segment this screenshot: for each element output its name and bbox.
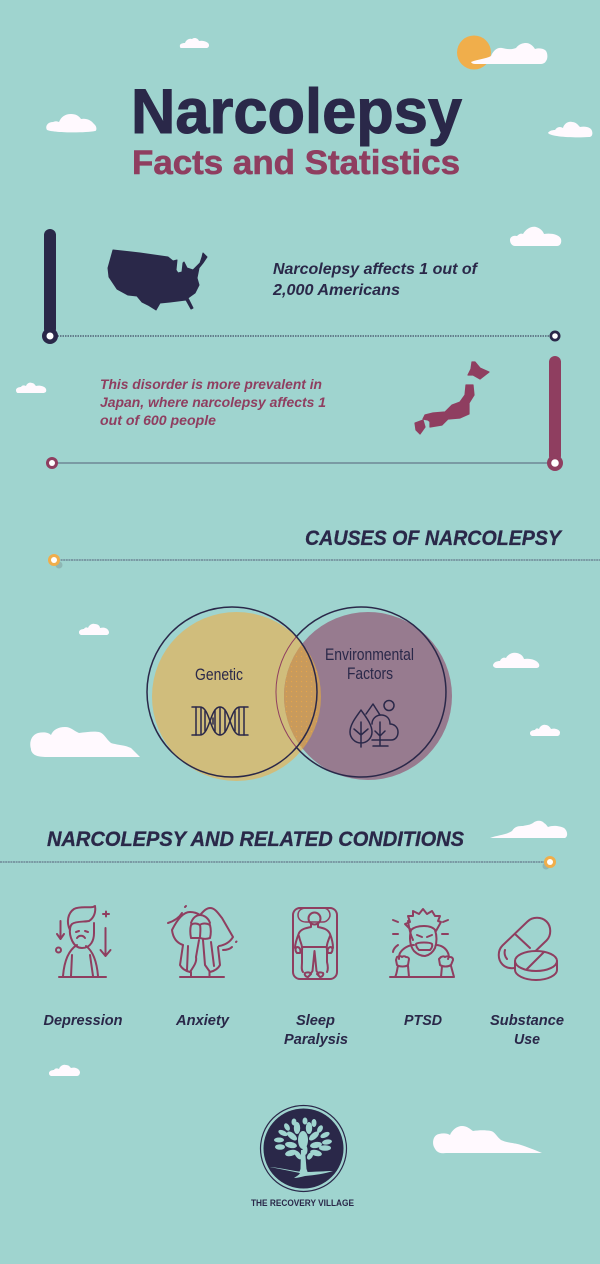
cloud: bottom right	[433, 1126, 542, 1153]
text: USA fact: Narcolepsy affects 1 out of	[273, 261, 479, 278]
logo: wordmark: THE RECOVERY VILLAGE	[251, 1198, 354, 1208]
logo: tree	[270, 1118, 333, 1178]
cloud: top centre	[180, 38, 209, 48]
subtitle: Facts and Statistics	[132, 144, 460, 182]
timeline: USA	[42, 229, 560, 344]
venn: overlap	[284, 644, 321, 749]
label: genetic: Genetic	[195, 665, 243, 684]
label: depression: Depression	[44, 1012, 122, 1029]
cloud: left of title	[46, 114, 96, 132]
icon: PTSD	[390, 909, 454, 977]
cloud: bottom left	[49, 1065, 80, 1076]
condition: PTSD	[390, 909, 454, 1029]
icon: anxiety	[168, 906, 236, 977]
heading: related conditions: NARCOLEPSY AND RELATED CONDITIONS	[47, 828, 464, 851]
text: Japan fact: Japan, where narcolepsy affects 1	[100, 394, 326, 410]
chart: venn diagram	[147, 607, 452, 781]
cloud: right of title	[548, 122, 592, 137]
condition: substance use	[490, 918, 564, 1048]
condition: anxiety	[168, 906, 236, 1029]
icon: DNA	[192, 707, 248, 735]
cloud: left of venn top	[79, 624, 109, 635]
heading: causes: CAUSES OF NARCOLEPSY	[305, 527, 563, 550]
icon: depression	[56, 906, 110, 977]
label: environmental factors: Environmental	[325, 645, 414, 664]
venn: genetic fill	[152, 612, 321, 781]
cloud: right of venn top	[493, 653, 539, 668]
panel: USA fact	[42, 229, 560, 344]
text: Japan fact: This disorder is more prevalent in	[100, 376, 322, 392]
divider: causes	[48, 554, 600, 568]
label: PTSD: PTSD	[404, 1012, 442, 1029]
label: substance use: Substance	[490, 1012, 564, 1029]
divider: related conditions	[0, 856, 556, 870]
panel: Japan fact	[46, 356, 563, 471]
cloud: right of conditions heading	[490, 821, 567, 838]
cloud: right of venn bottom	[530, 725, 560, 736]
venn: environmental fill	[284, 612, 452, 780]
text: USA fact: 2,000 Americans	[272, 282, 400, 299]
icon: sun	[457, 36, 491, 70]
label: sleep paralysis: Paralysis	[284, 1031, 348, 1048]
text: Japan fact: out of 600 people	[100, 412, 216, 428]
timeline: Japan	[46, 356, 563, 471]
logo: The Recovery Village	[251, 1106, 354, 1208]
condition: depression	[44, 906, 122, 1029]
icon: Japan map	[415, 362, 489, 434]
logo: badge	[260, 1106, 346, 1192]
cloud: beside sun	[471, 43, 547, 64]
label: sleep paralysis: Sleep	[296, 1012, 335, 1029]
icon: trees	[350, 700, 398, 747]
label: anxiety: Anxiety	[175, 1012, 230, 1029]
cloud: left of venn bottom	[30, 727, 140, 757]
condition: sleep paralysis	[284, 908, 348, 1048]
label: environmental factors: Factors	[347, 664, 393, 683]
cloud: left of Japan fact	[16, 383, 46, 393]
title: Narcolepsy	[131, 77, 462, 147]
label: substance use: Use	[514, 1031, 540, 1048]
icon: USA map	[108, 250, 207, 310]
cloud: above USA fact	[510, 227, 561, 246]
icon: pills	[499, 918, 557, 980]
icon: sleep paralysis	[293, 908, 337, 979]
venn: outlines	[147, 607, 446, 777]
